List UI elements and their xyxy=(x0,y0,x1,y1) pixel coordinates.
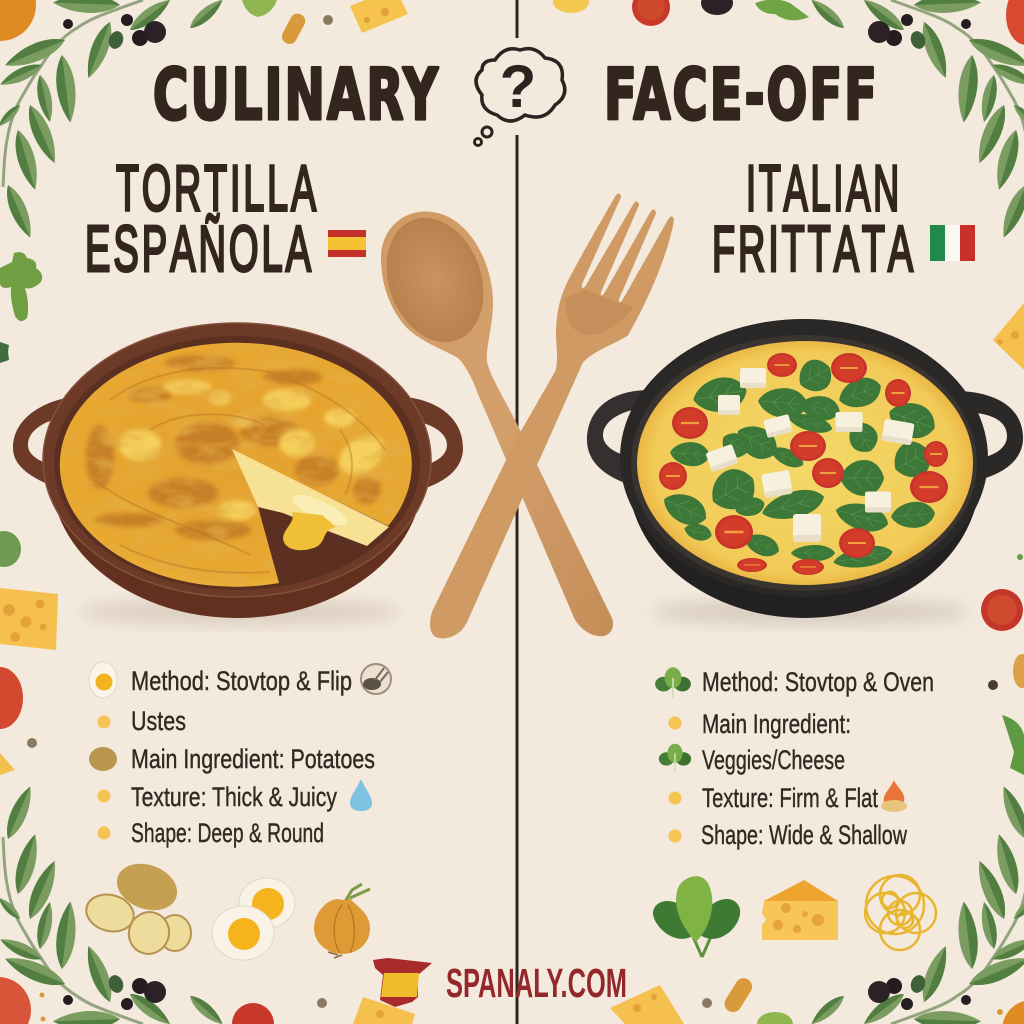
olive branch: top left xyxy=(0,0,226,240)
cheese cubes xyxy=(705,368,915,542)
panel: frittata facts list: Main Ingredient: xyxy=(702,709,851,739)
cheese below logo xyxy=(353,997,415,1024)
panel: tortilla facts list: Shape: Deep & Round xyxy=(131,818,324,848)
scattered ingredients: right edge xyxy=(981,303,1024,775)
panel: tortilla facts list: Main Ingredient: Potatoes xyxy=(131,744,375,774)
illustration: pasta nest xyxy=(865,875,936,950)
scattered ingredients: left edge xyxy=(0,252,58,775)
icon: italian flag xyxy=(930,225,975,261)
icon: fire xyxy=(881,780,907,812)
pan body xyxy=(51,332,423,618)
wooden fork xyxy=(431,194,673,637)
pan shadow xyxy=(650,599,970,625)
website label: SPANALY.COM xyxy=(446,960,627,1006)
left pan with tortilla xyxy=(13,323,463,625)
melted egg drip xyxy=(283,512,336,550)
icon: spinach small xyxy=(659,744,691,771)
icon: spinach xyxy=(655,667,691,698)
panel: frittata facts list xyxy=(655,667,934,850)
scattered ingredients: top edge xyxy=(0,0,1024,46)
potato slices xyxy=(119,380,392,520)
pan handles xyxy=(13,396,80,495)
panel: tortilla facts list: Method: Stovtop & Flip xyxy=(131,666,352,696)
panel: tortilla facts list: Texture: Thick & Juicy xyxy=(131,782,337,812)
icon: pan in circle xyxy=(361,664,391,694)
pan handles xyxy=(587,390,650,490)
thought bubble with question mark xyxy=(474,49,565,145)
center divider line xyxy=(516,0,518,1024)
olive branch: bottom left xyxy=(0,784,226,1024)
icon: spanish flag xyxy=(328,230,366,257)
tortilla with cut wedge xyxy=(60,343,412,587)
thought bubble with question mark: ? xyxy=(500,53,536,120)
scattered ingredients: bottom edge xyxy=(0,975,1024,1024)
heading: tortilla española xyxy=(85,152,319,285)
icon: water drop xyxy=(350,779,372,811)
panel: tortilla facts list xyxy=(89,662,391,848)
illustration: spinach xyxy=(653,876,740,957)
pan body xyxy=(628,332,980,618)
heading: tortilla española: TORTILLA xyxy=(116,152,319,224)
icon: potato xyxy=(89,747,117,771)
illustration: fried eggs xyxy=(212,878,295,960)
cherry tomatoes xyxy=(659,353,948,575)
browned swirls xyxy=(86,355,381,540)
spinach leaves xyxy=(658,354,940,572)
illustration: onion xyxy=(314,884,370,958)
browned texture xyxy=(60,338,418,588)
title: face-off: FACE-OFF xyxy=(604,54,879,136)
panel: tortilla facts list: Ustes xyxy=(131,706,186,736)
illustration: potatoes xyxy=(82,856,191,960)
heading: tortilla española: ESPAÑOLA xyxy=(85,212,314,285)
right pan with frittata xyxy=(587,319,1023,625)
heading: italian frittata: ITALIAN xyxy=(746,152,902,224)
olive branch: top right xyxy=(808,0,1024,240)
illustration: cheese wedge xyxy=(762,880,838,940)
icon: egg xyxy=(89,662,117,698)
panel: frittata facts list: Veggies/Cheese xyxy=(702,745,845,775)
wooden spoon xyxy=(370,204,613,636)
heading: italian frittata xyxy=(712,152,916,285)
panel: frittata facts list: Method: Stovtop & Oven xyxy=(702,667,934,697)
title: culinary: CULINARY xyxy=(153,54,440,136)
pan shadow xyxy=(80,599,400,625)
olive branch: bottom right xyxy=(808,784,1024,1024)
panel: frittata facts list: Texture: Firm & Flat xyxy=(702,783,878,813)
logo: spain map xyxy=(373,958,432,1007)
title xyxy=(153,54,879,136)
panel: frittata facts list: Shape: Wide & Shallow xyxy=(701,820,907,850)
frittata xyxy=(637,341,973,585)
cut face of tortilla xyxy=(232,449,389,546)
